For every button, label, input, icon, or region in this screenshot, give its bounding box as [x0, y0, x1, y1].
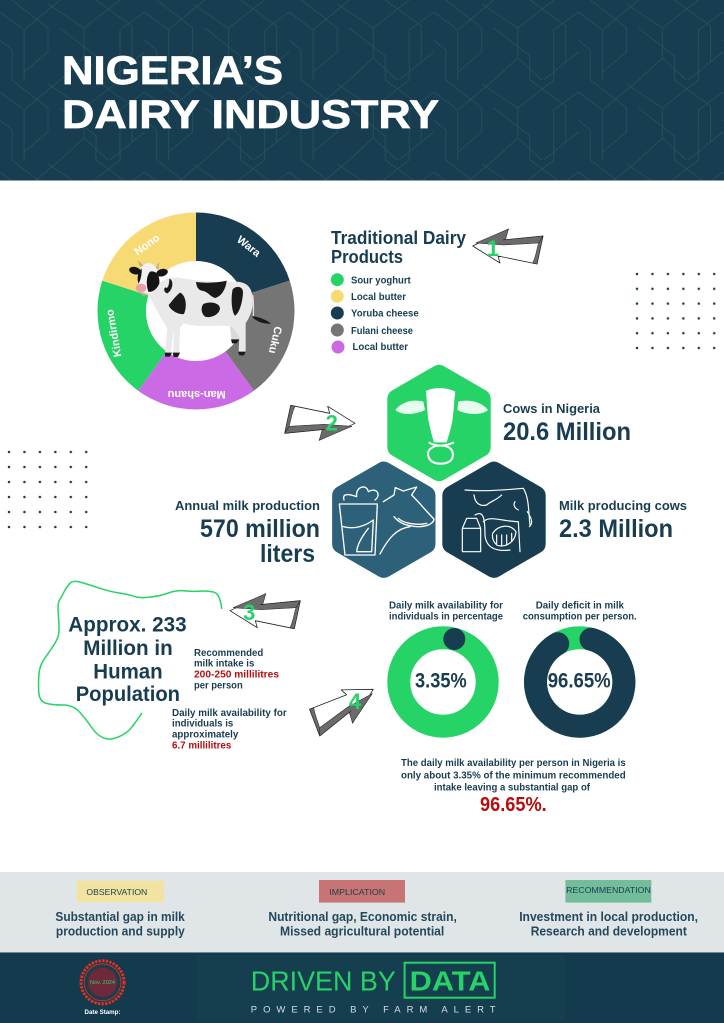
title: DAIRY INDUSTRY: [62, 93, 439, 137]
conclusion text: The daily milk availability per person in Nigeria is: [401, 757, 626, 769]
caption: [389, 599, 503, 622]
legend: Yoruba cheese: [351, 308, 419, 320]
value: 3.35%: [415, 669, 467, 692]
stat: milk producing cows: 2.3 Million: [559, 515, 673, 543]
segment: Nono: [102, 212, 196, 296]
donut chart: daily availability: [389, 599, 503, 726]
text: daily milk availability: approximately: [172, 729, 238, 741]
implication text: Missed agricultural potential: [280, 923, 444, 938]
recommendation text: Investment in local production,: [519, 909, 698, 924]
tag: recommendation: [565, 880, 651, 903]
conclusion text: intake leaving a substantial gap of: [434, 782, 590, 794]
stat: cows in Nigeria: Cows in Nigeria: [503, 402, 601, 416]
stat: annual milk production: Annual milk production: [175, 499, 320, 513]
heading: traditional dairy products: [331, 228, 466, 267]
text: daily milk availability: individuals is: [172, 718, 233, 730]
observation text: [55, 909, 186, 938]
heading: traditional dairy products: Traditional Dairy: [331, 228, 466, 248]
stat: milk producing cows: [559, 499, 687, 543]
segment: Man-shanu: [138, 352, 254, 410]
decorative dot grid left: [8, 450, 88, 528]
conclusion text: only about 3.35% of the minimum recommended: [401, 769, 626, 781]
heading: traditional dairy products: Products: [331, 247, 403, 267]
availability marker: [443, 628, 465, 650]
text: recommended milk intake: Recommended: [194, 647, 263, 659]
text: recommended milk intake: milk intake is: [194, 658, 254, 670]
date stamp: Nov. 2024: [90, 980, 115, 986]
caption: consumption per person.: [523, 610, 637, 622]
panel: implication: [268, 880, 457, 938]
deficit arc: [536, 639, 624, 726]
value: 96.65%: [548, 669, 611, 692]
tag: recommendation: RECOMMENDATION: [566, 885, 651, 895]
label: Nono: Nono: [132, 232, 162, 258]
summary band: [0, 872, 724, 952]
map outline: Nigeria: [39, 581, 222, 739]
arrow 2: 2: [326, 410, 338, 436]
date stamp: Date Stamp:: [84, 1009, 120, 1016]
stat: annual milk production: liters: [260, 540, 315, 568]
caption: Daily deficit in milk: [536, 599, 624, 611]
icon: milking cow and bottle: [462, 488, 532, 552]
tag: implication: [319, 880, 405, 903]
hexagon: cows in Nigeria: [395, 375, 488, 471]
text: human population: Population: [76, 683, 180, 706]
conclusion text: 96.65%.: [480, 794, 547, 816]
label: Cuku: Cuku: [266, 325, 284, 355]
donut chart: traditional dairy products: [97, 212, 295, 410]
text: human population: Million in: [83, 637, 173, 660]
ring: [399, 638, 487, 726]
implication text: [268, 909, 457, 938]
observation text: Substantial gap in milk: [55, 909, 186, 924]
header band: [0, 0, 724, 181]
segment: Wara: [196, 212, 290, 296]
caption: Daily milk availability for: [389, 599, 503, 611]
text: daily milk availability: 6.7 millilitres: [172, 739, 231, 751]
arrow 3: 3: [243, 600, 255, 625]
legend: [331, 273, 419, 354]
legend: Sour yoghurt: [351, 274, 411, 286]
text: human population: Approx. 233: [68, 614, 187, 637]
arrow 1: [473, 229, 543, 264]
text: recommended milk intake: [194, 647, 279, 692]
panel: recommendation: [519, 880, 698, 938]
title: NIGERIA’S: [62, 49, 283, 93]
stat: cows in Nigeria: 20.6 Million: [503, 418, 631, 446]
legend: Local butter: [351, 291, 406, 303]
arrow 1: 1: [487, 236, 499, 261]
tag: observation: OBSERVATION: [86, 887, 147, 897]
text: recommended milk intake: per person: [194, 680, 243, 692]
icon: cow face: [395, 388, 488, 464]
text: daily milk availability: Daily milk availability for: [172, 707, 287, 719]
ring: [536, 638, 624, 726]
text: human population: Human: [93, 660, 163, 683]
donut chart: daily deficit: [523, 599, 637, 726]
tag: implication: IMPLICATION: [329, 887, 385, 897]
text: human population: [68, 614, 187, 706]
segment: Kindirmo: [97, 281, 167, 391]
stat: cows in Nigeria: [503, 402, 631, 446]
hexagon: milk producing cows: [452, 472, 536, 568]
arrow 3: [230, 594, 300, 629]
stat: annual milk production: 570 million: [200, 515, 320, 543]
brand: driven by data: DATA: [410, 966, 490, 997]
arrow 4: [305, 674, 383, 742]
text: daily milk availability: [172, 707, 287, 751]
recommendation text: [519, 909, 698, 938]
stat: milk producing cows: Milk producing cows: [559, 499, 687, 513]
brand: driven by data: POWERED BY FARM ALERT: [251, 1005, 496, 1016]
hexagon: annual milk production: [339, 472, 434, 568]
arrow 2: [285, 405, 355, 440]
text: recommended milk intake: 200-250 millilitres: [194, 669, 279, 681]
implication text: Nutritional gap, Economic strain,: [268, 909, 457, 924]
caption: [523, 599, 637, 622]
panel: observation: [55, 881, 186, 938]
footer band: [0, 952, 724, 1023]
title: [62, 49, 439, 137]
observation text: production and supply: [56, 923, 186, 938]
brand: driven by data: DRIVEN BY: [251, 966, 396, 997]
stat: annual milk production: [175, 499, 320, 568]
legend: Local butter: [352, 341, 408, 353]
label: Kindirmo: Kindirmo: [104, 308, 124, 358]
legend: Fulani cheese: [351, 325, 413, 337]
conclusion text: [401, 757, 626, 816]
brand: driven by data: [251, 963, 496, 1016]
segment: Cuku: [225, 281, 295, 391]
arrow 4: 4: [349, 689, 362, 714]
icon: milk glass and cow: [339, 487, 434, 555]
decorative dot grid right: [636, 272, 716, 350]
icon: dairy cow: [128, 260, 271, 357]
caption: individuals in percentage: [389, 610, 503, 622]
date stamp: [81, 961, 124, 1016]
recommendation text: Research and development: [531, 923, 688, 938]
label: Wara: Wara: [234, 234, 263, 260]
label: Man-shanu: Man-shanu: [168, 388, 226, 400]
